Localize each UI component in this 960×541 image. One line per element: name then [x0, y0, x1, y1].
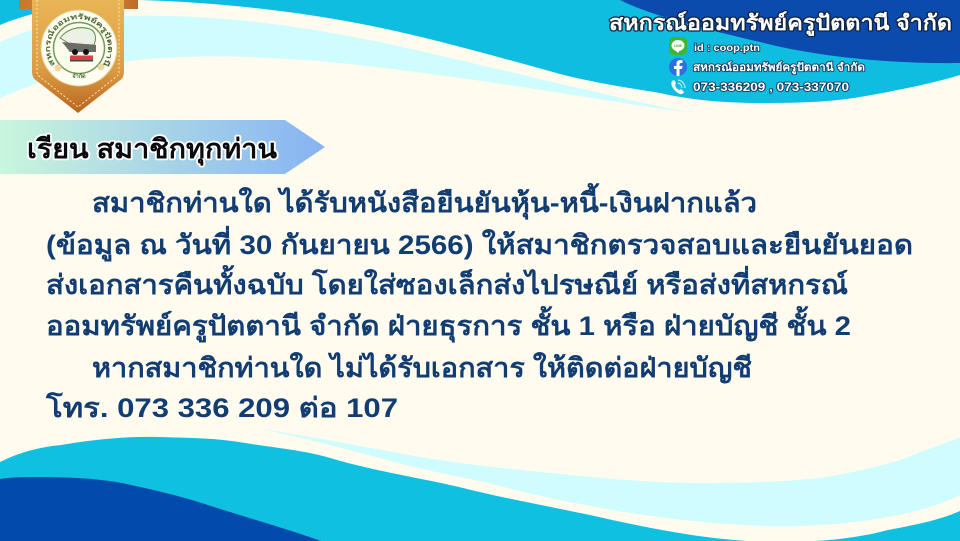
icon: LINE	[669, 37, 687, 55]
badge ribbon	[32, 0, 124, 113]
contact: line id: id : coop.ptn	[694, 42, 760, 54]
body text: (ข้อมูล ณ วันที่ 30 กันยายน 2566) ให้สมาชิกตรวจสอบและยืนยันยอด	[46, 225, 913, 262]
body text: ออมทรัพย์ครูปัตตานี จำกัด ฝ่ายธุรการ ชั้น 1 หรือ ฝ่ายบัญชี ชั้น 2	[46, 305, 851, 343]
body text: โทร. 073 336 209 ต่อ 107	[45, 391, 398, 423]
body text: สมาชิกท่านใด ได้รับหนังสือยืนยันหุ้น-หนี้-เงินฝากแล้ว	[92, 182, 757, 220]
emblem disc	[41, 10, 117, 86]
emblem hill	[60, 28, 95, 45]
emblem cannon	[62, 42, 96, 52]
banner text: เรียน สมาชิกทุกท่าน	[27, 134, 278, 166]
top waves background	[0, 0, 960, 113]
emblem lower text: จำกัด	[72, 73, 86, 80]
contact: facebook page: สหกรณ์ออมทรัพย์ครูปัตตานี จำกัด	[693, 61, 865, 75]
emblem red plinth	[70, 56, 93, 60]
body text: หากสมาชิกท่านใด ไม่ได้รับเอกสาร ให้ติดต่อฝ่ายบัญชี	[92, 352, 752, 384]
icon: LINE: LINE	[674, 44, 683, 48]
badge ribbon tabs	[19, 0, 138, 9]
body text	[45, 182, 913, 423]
body text: ส่งเอกสารคืนทั้งฉบับ โดยใส่ซองเล็กส่งไปรษณีย์ หรือส่งที่สหกรณ์	[46, 264, 848, 300]
icon: facebook	[669, 58, 687, 76]
salutation banner	[0, 120, 325, 174]
organisation name heading: สหกรณ์ออมทรัพย์ครูปัตตานี จำกัด	[609, 11, 952, 37]
emblem ring text: สหกรณ์ออมทรัพย์ครูปัตตานี	[46, 13, 112, 67]
bottom waves background	[0, 428, 960, 541]
contact: phone numbers: 073-336209 , 073-337070	[693, 82, 849, 94]
banner arrow	[0, 120, 325, 174]
stitching	[37, 0, 119, 107]
badge emblem	[19, 0, 138, 113]
icon: phone	[671, 80, 685, 94]
emblem flowers	[54, 64, 62, 72]
